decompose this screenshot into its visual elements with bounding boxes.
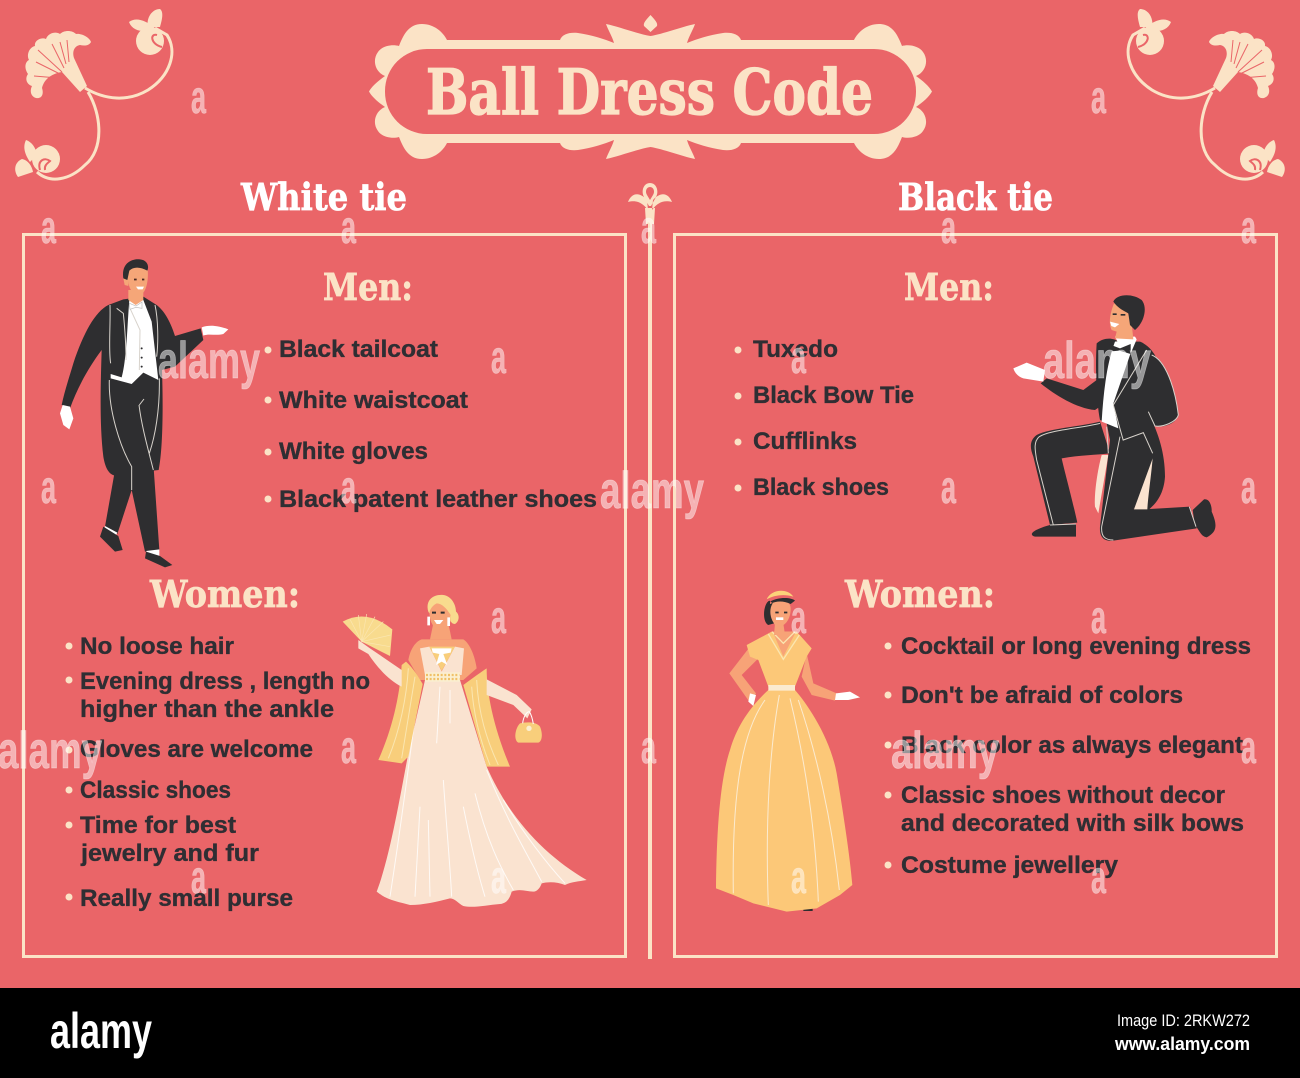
list: women white tie: jewelry and fur bbox=[80, 840, 259, 867]
heading: Black tie: Black tie bbox=[898, 175, 1053, 219]
list: women white tie: Time for best bbox=[80, 812, 236, 839]
watermark: large marks: alamy bbox=[600, 462, 704, 520]
watermark: small marks: a bbox=[791, 851, 806, 903]
heading: women: Women: bbox=[149, 572, 300, 616]
list: men white tie: Black tailcoat bbox=[279, 336, 438, 363]
watermark: large marks: alamy bbox=[0, 722, 102, 780]
illustration: kneeling man in tuxedo bbox=[1013, 295, 1215, 541]
watermark: small marks: a bbox=[491, 591, 506, 643]
watermark: large marks: alamy bbox=[891, 722, 999, 780]
watermark: small marks: a bbox=[1091, 851, 1106, 903]
list: women white tie: Classic shoes bbox=[80, 777, 231, 804]
title: Ball Dress Code bbox=[426, 55, 873, 129]
watermark: small marks: a bbox=[791, 331, 806, 383]
illustration: man in tailcoat bbox=[60, 259, 228, 567]
list: women white tie: No loose hair bbox=[80, 633, 234, 660]
watermark: small marks: a bbox=[191, 71, 206, 123]
panel: black tie bbox=[674, 234, 1276, 956]
watermark: small marks: a bbox=[1241, 461, 1256, 513]
watermark: small marks: a bbox=[341, 721, 356, 773]
title banner bbox=[369, 15, 932, 159]
list: women black tie: Don't be afraid of colors bbox=[901, 682, 1183, 709]
list: men black tie: Tuxedo bbox=[753, 336, 838, 363]
watermark: small marks: a bbox=[491, 851, 506, 903]
center divider ornament bbox=[628, 183, 672, 959]
heading: men: Men: bbox=[323, 265, 413, 309]
watermark: small marks: a bbox=[1241, 201, 1256, 253]
list: men black tie: Black Bow Tie bbox=[753, 382, 914, 409]
watermark: small marks: a bbox=[941, 201, 956, 253]
watermark: small marks: a bbox=[1241, 721, 1256, 773]
footer url: www.alamy.com bbox=[1114, 1034, 1250, 1054]
watermark: small marks: a bbox=[791, 591, 806, 643]
list: women black tie: and decorated with silk bows bbox=[901, 810, 1244, 837]
footer image id: Image ID: 2RKW272 bbox=[1117, 1011, 1250, 1030]
watermark: small marks bbox=[41, 71, 1256, 903]
watermark: small marks: a bbox=[641, 721, 656, 773]
watermark: small marks: a bbox=[641, 201, 656, 253]
panel: white tie bbox=[24, 234, 626, 956]
list: women white tie: Really small purse bbox=[80, 885, 293, 912]
list: women black tie: Costume jewellery bbox=[901, 852, 1119, 879]
heading: women: Women: bbox=[844, 572, 995, 616]
watermark: small marks: a bbox=[191, 851, 206, 903]
watermark: large marks: alamy bbox=[1043, 332, 1151, 390]
banner frame bbox=[369, 15, 932, 159]
list: men white tie: Black patent leather shoes bbox=[279, 486, 597, 513]
watermark: small marks: a bbox=[41, 201, 56, 253]
list: women white tie: Gloves are welcome bbox=[80, 736, 313, 763]
list: men black tie: Cufflinks bbox=[753, 428, 857, 455]
list: women white tie bbox=[66, 633, 370, 912]
watermark: small marks: a bbox=[41, 461, 56, 513]
list: women black tie: Black color as always elegant bbox=[901, 732, 1243, 759]
watermark: small marks: a bbox=[1091, 591, 1106, 643]
illustration: woman in evening gown with fan bbox=[343, 595, 587, 907]
list: women white tie: higher than the ankle bbox=[80, 696, 334, 723]
list: men black tie bbox=[734, 336, 914, 501]
list: men white tie: White gloves bbox=[279, 438, 428, 465]
list: women white tie: Evening dress , length no bbox=[80, 668, 370, 695]
ornament: top left flourish bbox=[15, 9, 172, 179]
watermark: small marks: a bbox=[341, 461, 356, 513]
heading: White tie: White tie bbox=[240, 175, 407, 219]
watermark: large marks: alamy bbox=[158, 332, 260, 390]
list: women black tie: Cocktail or long evening dress bbox=[901, 633, 1251, 660]
list: men black tie: Black shoes bbox=[753, 474, 889, 501]
list: men white tie: White waistcoat bbox=[279, 387, 468, 414]
illustration: woman in yellow ball gown bbox=[716, 591, 860, 912]
heading: men: Men: bbox=[904, 265, 994, 309]
list: women black tie bbox=[884, 633, 1251, 879]
list: women black tie: Classic shoes without decor bbox=[901, 782, 1225, 809]
list: men white tie bbox=[264, 336, 597, 513]
ornament: top right flourish bbox=[1128, 9, 1285, 179]
watermark: small marks: a bbox=[491, 331, 506, 383]
watermark: small marks: a bbox=[1091, 71, 1106, 123]
watermark: small marks: a bbox=[941, 461, 956, 513]
watermark: small marks: a bbox=[341, 201, 356, 253]
watermark: large marks bbox=[0, 332, 1151, 780]
footer logo: alamy bbox=[50, 1003, 152, 1059]
